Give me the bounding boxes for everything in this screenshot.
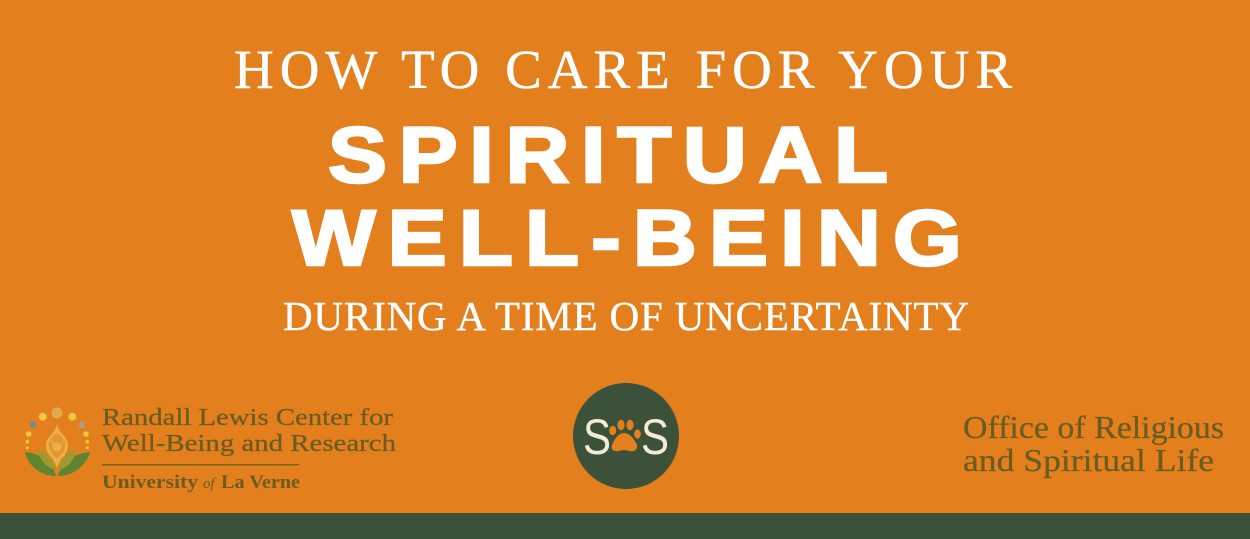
logo: Randall Lewis Center: University <box>102 472 199 493</box>
logo: SOS paw badge <box>573 383 679 489</box>
title: well-being: WELL-BEING <box>292 193 962 282</box>
logo: Office of Religious and Spiritual Life: and Spiritual Life <box>963 442 1214 478</box>
icon: lotus figure <box>25 408 90 476</box>
logo: Randall Lewis Center: Well-Being and Research <box>102 430 396 457</box>
footer band <box>0 513 1250 539</box>
logo: SOS paw badge: S <box>583 409 611 465</box>
logo: Randall Lewis Center <box>25 404 396 493</box>
title: spiritual: SPIRITUAL <box>328 110 888 199</box>
title line: how to care for your: HOW TO CARE FOR YOUR <box>234 39 1012 100</box>
logo: SOS paw badge: S <box>641 409 669 465</box>
logo: Randall Lewis Center: La Verne <box>221 472 300 493</box>
logo text: Randall Lewis Center for <box>102 404 393 431</box>
logo: Office of Religious and Spiritual Life: Office of Religious <box>963 409 1224 445</box>
icon: paw <box>609 420 641 451</box>
logo: Randall Lewis Center: of <box>203 476 216 492</box>
subtitle: DURING A TIME OF UNCERTAINTY <box>283 293 969 339</box>
logo: Office of Religious and Spiritual Life <box>963 409 1224 478</box>
